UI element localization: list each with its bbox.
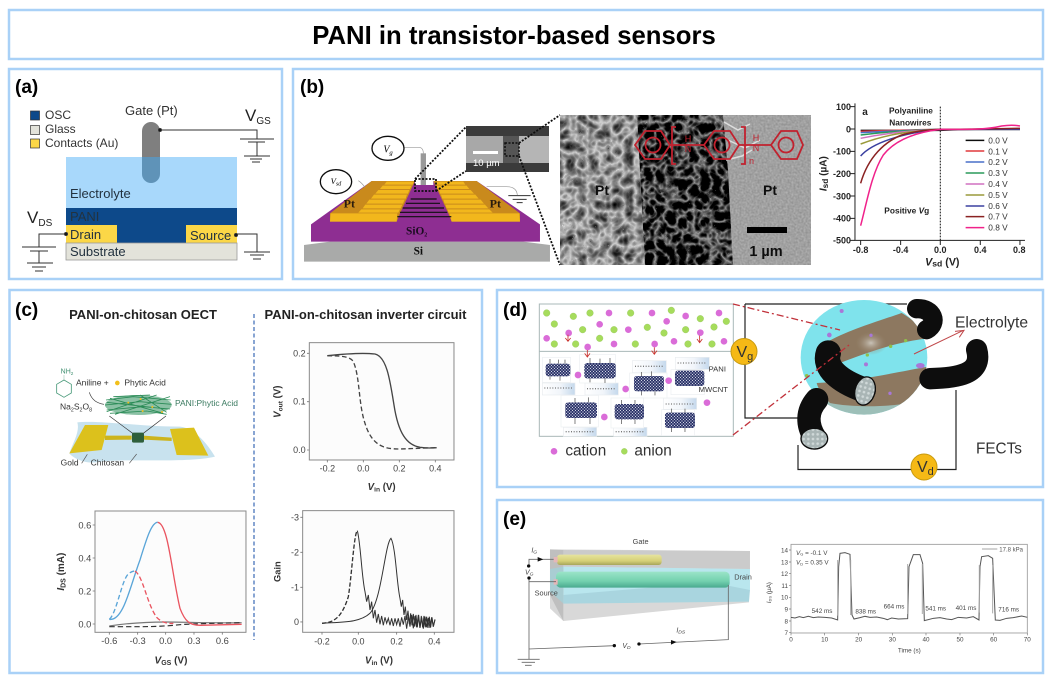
chart: IDS vs VGS: I bbox=[56, 588, 67, 591]
OECT schematic: Gold bbox=[61, 458, 79, 468]
device illustration: sd bbox=[336, 181, 341, 187]
voltage labels: V bbox=[27, 208, 38, 227]
chart: IDS time response: 30 bbox=[889, 636, 896, 643]
OECT schematic: S bbox=[74, 402, 80, 412]
voltage labels: GS bbox=[256, 116, 271, 127]
chart: IDS vs VGS: (mA) bbox=[56, 553, 67, 578]
fiber device schematic: V bbox=[622, 643, 627, 650]
chart: gain vs Vin: -2 bbox=[291, 547, 299, 557]
ion and nanotube inset: anion bbox=[634, 443, 672, 460]
device stack: Electrolyte bbox=[70, 186, 131, 201]
chart: IDS time response: = -0.1 V bbox=[803, 550, 828, 557]
SEM micrograph: Pt bbox=[763, 182, 777, 198]
chart: IDS time response: 14 bbox=[781, 547, 788, 554]
chart: gain vs Vin: -3 bbox=[291, 512, 299, 522]
OECT schematic: O bbox=[82, 402, 89, 412]
panel: (a) transistor schematic bbox=[9, 69, 282, 279]
I-V chart: -200 bbox=[833, 169, 851, 179]
drain voltage badge: d bbox=[928, 466, 934, 478]
OECT schematic bbox=[57, 369, 238, 468]
I-V chart: 0.1 V bbox=[988, 146, 1008, 156]
chart: IDS vs VGS: -0.3 bbox=[130, 636, 146, 646]
polymer tiles bbox=[542, 357, 709, 436]
device stack: Source bbox=[190, 228, 231, 243]
panel label d: (d) bbox=[503, 300, 527, 321]
chart: IDS time response: 70 bbox=[1024, 636, 1031, 643]
SEM micrograph: Pt bbox=[595, 182, 609, 198]
chart: IDS time response: 20 bbox=[855, 636, 863, 643]
gate electrode: Gate (Pt) bbox=[125, 103, 178, 118]
chart: IDS time response: 40 bbox=[922, 636, 930, 643]
chart: IDS time response: 664 ms bbox=[884, 604, 904, 611]
device stack bbox=[66, 157, 237, 260]
chart: IDS time response: 17.8 kPa bbox=[999, 547, 1024, 553]
chart: IDS vs VGS: DS bbox=[61, 578, 68, 588]
chart: Vout vs Vin: (V) bbox=[273, 385, 284, 401]
fiber device schematic: G bbox=[530, 571, 534, 577]
polyaniline structure: H bbox=[753, 133, 759, 143]
panel label a: (a) bbox=[15, 77, 38, 98]
device illustration: V bbox=[383, 145, 389, 156]
legend: Glass bbox=[45, 122, 76, 136]
ion and nanotube inset bbox=[539, 304, 733, 460]
device illustration: Si bbox=[414, 245, 423, 257]
I-V chart: -400 bbox=[833, 214, 851, 224]
I-V chart: 0.5 V bbox=[988, 190, 1008, 200]
chart: IDS time response: 8 bbox=[784, 618, 788, 625]
heading: inverter: PANI-on-chitosan inverter circuit bbox=[264, 307, 467, 322]
I-V chart: 0.0 V bbox=[988, 135, 1008, 145]
device stack: PANI bbox=[70, 209, 99, 224]
chart: IDS time response: V bbox=[796, 560, 801, 567]
I-V chart: Nanowires bbox=[889, 117, 932, 127]
drain voltage badge bbox=[911, 454, 937, 480]
I-V chart: V bbox=[925, 256, 933, 268]
chart: IDS time response: 541 ms bbox=[925, 606, 946, 613]
device illustration: 2 bbox=[424, 232, 427, 238]
fiber device schematic bbox=[518, 537, 752, 665]
chart: gain vs Vin: -1 bbox=[291, 582, 299, 592]
chart: IDS vs VGS: 0.6 bbox=[78, 520, 91, 530]
chart: Vout vs Vin: V bbox=[368, 482, 376, 493]
chart: Vout vs Vin: 0.2 bbox=[293, 348, 306, 358]
chart: IDS time response: 10 bbox=[821, 636, 829, 643]
chart: IDS time response: (µA) bbox=[766, 582, 773, 596]
title banner bbox=[9, 10, 1043, 59]
zoom inset: 10 µm micrograph bbox=[466, 126, 549, 172]
chart: IDS time response: 10 bbox=[781, 595, 788, 602]
gate voltage badge: V bbox=[736, 344, 747, 361]
I-V chart: 0.2 V bbox=[988, 157, 1008, 167]
chart: gain vs Vin: 0.4 bbox=[428, 636, 441, 646]
I-V chart: sd bbox=[820, 179, 830, 188]
I-V chart: -100 bbox=[833, 147, 851, 157]
I-V chart: -500 bbox=[833, 236, 851, 246]
panel label c: (c) bbox=[15, 300, 38, 321]
dotted zoom guides bbox=[415, 115, 560, 265]
OECT schematic: NH bbox=[61, 369, 71, 376]
gate voltage badge bbox=[731, 338, 757, 364]
fiber transistor sphere: FECTs bbox=[976, 440, 1022, 457]
I-V chart: Polyaniline bbox=[889, 105, 933, 115]
device illustration bbox=[304, 136, 550, 262]
chart: IDS time response: 12 bbox=[781, 571, 788, 578]
fiber transistor sphere: Electrolyte bbox=[955, 315, 1028, 332]
chart: Vout vs Vin: 0.4 bbox=[429, 463, 442, 473]
chart: Vout vs Vin: V bbox=[273, 410, 284, 418]
OECT schematic: 2 bbox=[71, 371, 74, 376]
I-V chart: 0.7 V bbox=[988, 212, 1008, 222]
OECT schematic: 2 bbox=[79, 407, 82, 413]
gate electrode bbox=[125, 103, 178, 183]
SEM micrograph bbox=[560, 115, 811, 265]
I-V chart: a bbox=[862, 107, 868, 118]
fiber device schematic: Source bbox=[535, 589, 558, 598]
OECT schematic: Phytic Acid bbox=[124, 378, 166, 388]
I-V chart: -0.4 bbox=[893, 245, 908, 255]
chart: IDS vs VGS: -0.6 bbox=[101, 636, 117, 646]
OECT schematic: 2 bbox=[71, 407, 74, 413]
fiber device schematic: I bbox=[676, 627, 678, 634]
chart: Vout vs Vin: 0.1 bbox=[293, 397, 306, 407]
I-V chart: 100 bbox=[836, 102, 851, 112]
voltage labels: V bbox=[245, 106, 256, 125]
I-V chart: -300 bbox=[833, 191, 851, 201]
zoom inset: 10 µm micrograph: 10 µm bbox=[473, 158, 500, 169]
I-V chart: 0.8 bbox=[1013, 245, 1026, 255]
device stack: Substrate bbox=[70, 244, 126, 259]
drain voltage badge: V bbox=[917, 459, 928, 476]
I-V chart: 0.4 bbox=[974, 245, 987, 255]
circuit wiring and grounds bbox=[22, 128, 274, 271]
chart: IDS time response: 60 bbox=[990, 636, 998, 643]
device illustration: SiO bbox=[406, 225, 424, 237]
fiber device schematic: Gate bbox=[633, 537, 649, 546]
chart: gain vs Vin: (V) bbox=[377, 655, 393, 666]
chart: IDS time response: 7 bbox=[784, 630, 788, 637]
OECT schematic: 8 bbox=[89, 407, 92, 413]
chart: Vout vs Vin bbox=[273, 343, 454, 494]
panel: (c) PANI-on-chitosan bbox=[10, 290, 482, 673]
gate voltage badge: g bbox=[747, 351, 753, 363]
chart: IDS vs VGS: V bbox=[155, 655, 163, 666]
chart: IDS vs VGS: 0.6 bbox=[216, 636, 229, 646]
fiber device schematic: G bbox=[533, 549, 537, 555]
I-V chart: (µA) bbox=[819, 156, 830, 179]
fiber device schematic: Drain bbox=[734, 572, 752, 581]
polyaniline structure: N bbox=[685, 144, 691, 154]
ion and nanotube inset: cation bbox=[565, 443, 606, 460]
chart: IDS time response: 542 ms bbox=[812, 608, 832, 615]
fiber device schematic: I bbox=[531, 547, 533, 554]
carbon nanotubes bbox=[546, 363, 704, 428]
chart: gain vs Vin: 0 bbox=[294, 617, 299, 627]
chart: IDS time response: DS bbox=[768, 596, 773, 601]
divider bbox=[253, 314, 255, 640]
polyaniline structure: n bbox=[749, 156, 754, 166]
chart: IDS time response: D bbox=[800, 561, 803, 566]
I-V chart: 0 bbox=[846, 124, 851, 134]
panel label e: (e) bbox=[503, 509, 526, 530]
OECT schematic: Na bbox=[60, 402, 71, 412]
chart: IDS vs VGS: 0.2 bbox=[78, 586, 91, 596]
chart: Vout vs Vin: 0.0 bbox=[293, 445, 306, 455]
chart: IDS time response: 0 bbox=[789, 636, 793, 643]
chart: IDS vs VGS bbox=[56, 511, 246, 667]
chart: IDS time response: 50 bbox=[956, 636, 964, 643]
polyaniline structure bbox=[635, 127, 803, 166]
I-V chart: 0.8 V bbox=[988, 223, 1008, 233]
chart: IDS vs VGS: (V) bbox=[171, 655, 187, 666]
fiber transistor sphere bbox=[800, 300, 1028, 457]
chart: IDS time response: 716 ms bbox=[998, 607, 1019, 614]
legend: Contacts (Au) bbox=[45, 136, 118, 150]
legend bbox=[30, 108, 118, 150]
I-V chart: (V) bbox=[942, 256, 960, 268]
chart: IDS time response: I bbox=[766, 601, 773, 603]
chart: IDS time response bbox=[766, 544, 1031, 654]
chart: IDS time response: 9 bbox=[784, 606, 788, 613]
I-V chart: sd bbox=[932, 259, 942, 269]
panel: (b) nanowire device bbox=[293, 69, 1042, 279]
I-V chart: I bbox=[819, 188, 830, 191]
fiber device schematic: D bbox=[627, 645, 631, 651]
legend: OSC bbox=[45, 108, 71, 122]
chart: Vout vs Vin: out bbox=[277, 400, 284, 411]
I-V chart: 0.6 V bbox=[988, 201, 1008, 211]
device illustration: Pt bbox=[490, 197, 501, 211]
heading: OECT: PANI-on-chitosan OECT bbox=[69, 307, 217, 322]
I-V chart: 0.4 V bbox=[988, 179, 1008, 189]
chart: IDS time response: 838 ms bbox=[855, 608, 876, 615]
chart: gain vs Vin: in bbox=[371, 660, 377, 667]
chart: IDS time response: 13 bbox=[781, 559, 788, 566]
chart: gain vs Vin bbox=[273, 511, 454, 667]
chart: IDS time response: G bbox=[800, 552, 803, 557]
I-V chart bbox=[819, 102, 1026, 269]
fiber device schematic: V bbox=[525, 569, 530, 576]
chart: IDS time response: Time (s) bbox=[898, 647, 921, 654]
chart: Vout vs Vin: (V) bbox=[380, 482, 396, 493]
chart: gain vs Vin: -0.2 bbox=[314, 636, 330, 646]
chart: gain vs Vin: 0.0 bbox=[352, 636, 365, 646]
chart: IDS vs VGS: 0.0 bbox=[78, 619, 91, 629]
OECT schematic: Chitosan bbox=[91, 458, 124, 468]
OECT schematic: Aniline + bbox=[76, 378, 109, 388]
ions bbox=[543, 307, 730, 454]
chart: Vout vs Vin: -0.2 bbox=[320, 463, 335, 473]
device illustration: Pt bbox=[344, 197, 355, 211]
voltage labels bbox=[27, 106, 271, 229]
chart: IDS vs VGS: 0.3 bbox=[187, 636, 200, 646]
device illustration: V bbox=[331, 176, 336, 186]
chart: gain vs Vin: 0.2 bbox=[390, 636, 403, 646]
title banner: PANI in transistor-based sensors bbox=[312, 22, 716, 50]
polyaniline structure: N bbox=[753, 143, 759, 153]
circuit wiring bbox=[745, 304, 956, 470]
chart: IDS vs VGS: 0.0 bbox=[159, 636, 172, 646]
chart: IDS time response: 401 ms bbox=[956, 605, 976, 612]
fiber device schematic: DS bbox=[678, 629, 686, 635]
panel label b: (b) bbox=[300, 77, 324, 98]
chart: Vout vs Vin: in bbox=[374, 487, 380, 494]
chart: IDS time response: = 0.35 V bbox=[803, 560, 829, 567]
polyaniline structure: H bbox=[685, 134, 691, 144]
chart: IDS time response: 11 bbox=[781, 583, 788, 590]
ion and nanotube inset: PANI bbox=[709, 365, 726, 374]
dash-dot zoom guides bbox=[733, 304, 849, 435]
SEM micrograph: 1 µm bbox=[749, 244, 783, 260]
chart: Vout vs Vin: 0.0 bbox=[357, 463, 370, 473]
chart: IDS time response: V bbox=[796, 550, 801, 557]
ion and nanotube inset: MWCNT bbox=[699, 385, 728, 394]
panel: (e) pressure sensor bbox=[497, 500, 1043, 673]
chart: IDS vs VGS: GS bbox=[161, 660, 172, 667]
chart: Vout vs Vin: 0.2 bbox=[393, 463, 406, 473]
chart: IDS vs VGS: 0.4 bbox=[78, 553, 91, 563]
chart: gain vs Vin: V bbox=[365, 655, 373, 666]
I-V chart: Positive Vg bbox=[884, 206, 929, 216]
I-V chart: 0.3 V bbox=[988, 168, 1008, 178]
OECT schematic: PANI:Phytic Acid bbox=[175, 398, 238, 408]
I-V chart: -0.8 bbox=[853, 245, 868, 255]
panel: (d) fiber ECT bbox=[497, 290, 1043, 487]
device stack: Drain bbox=[70, 227, 101, 242]
I-V chart: 0.0 bbox=[934, 245, 947, 255]
device illustration: g bbox=[389, 149, 393, 156]
chart: gain vs Vin: Gain bbox=[273, 561, 283, 582]
voltage labels: DS bbox=[38, 218, 53, 229]
